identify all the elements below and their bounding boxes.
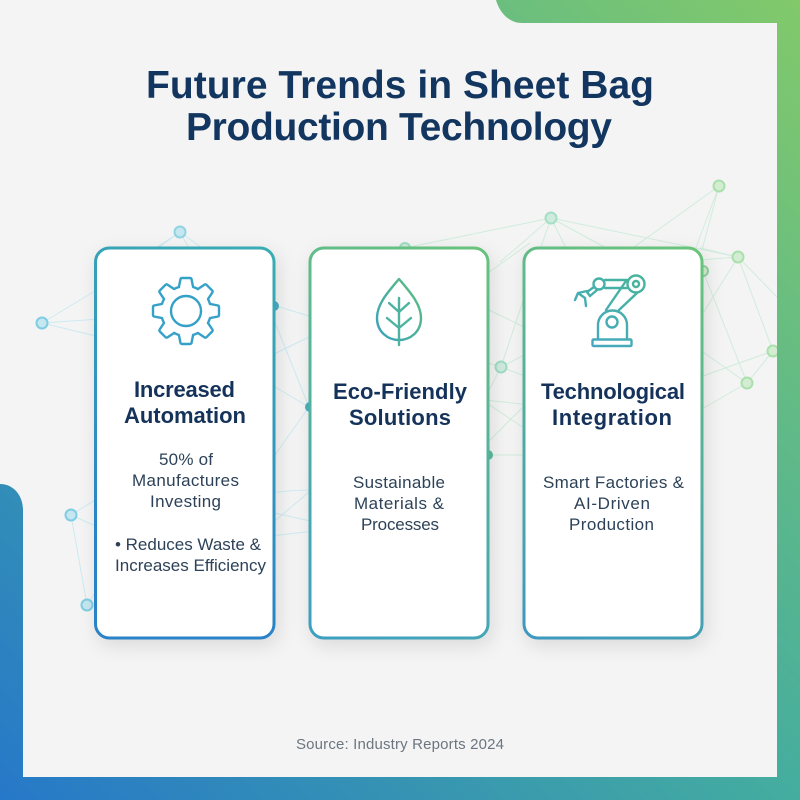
card text: 50% of — [159, 450, 213, 469]
card text: Processes — [361, 515, 439, 534]
card text: Sustainable — [353, 473, 445, 492]
panel: increased automation — [96, 248, 274, 638]
card heading: Integration — [552, 405, 672, 430]
card text: Production — [569, 515, 654, 534]
card text: Materials & — [354, 494, 445, 513]
card frame — [524, 248, 702, 638]
card frame — [96, 248, 274, 638]
card text — [353, 473, 445, 534]
icon: leaf — [377, 279, 421, 345]
source note: Source: Industry Reports 2024 — [296, 736, 504, 753]
card frame — [310, 248, 488, 638]
card text: AI-Driven — [574, 494, 650, 513]
network nodes — [36, 180, 778, 610]
title — [146, 64, 654, 149]
panel: technological integration — [524, 248, 702, 638]
card heading: Eco-Friendly — [333, 379, 468, 404]
card heading — [124, 377, 246, 428]
icon: robot arm — [575, 276, 644, 346]
card text: Increases Efficiency — [115, 556, 266, 575]
title: Production Technology — [186, 106, 612, 149]
card heading: Technological — [541, 379, 685, 404]
card text: Manufactures — [132, 471, 239, 490]
card text — [115, 450, 266, 575]
card heading — [333, 379, 468, 430]
card text: Smart Factories & — [543, 473, 685, 492]
card heading — [541, 379, 685, 430]
title: Future Trends in Sheet Bag — [146, 64, 654, 107]
network background: green right — [405, 186, 780, 455]
card heading: Increased — [134, 377, 235, 402]
card heading: Automation — [124, 403, 246, 428]
panel: eco-friendly solutions — [310, 248, 488, 638]
card text — [543, 473, 685, 534]
card text: Investing — [150, 492, 221, 511]
card text: • Reduces Waste & — [115, 535, 262, 554]
card heading: Solutions — [349, 405, 451, 430]
network background: blue left — [42, 232, 315, 605]
icon: gear — [153, 278, 219, 344]
